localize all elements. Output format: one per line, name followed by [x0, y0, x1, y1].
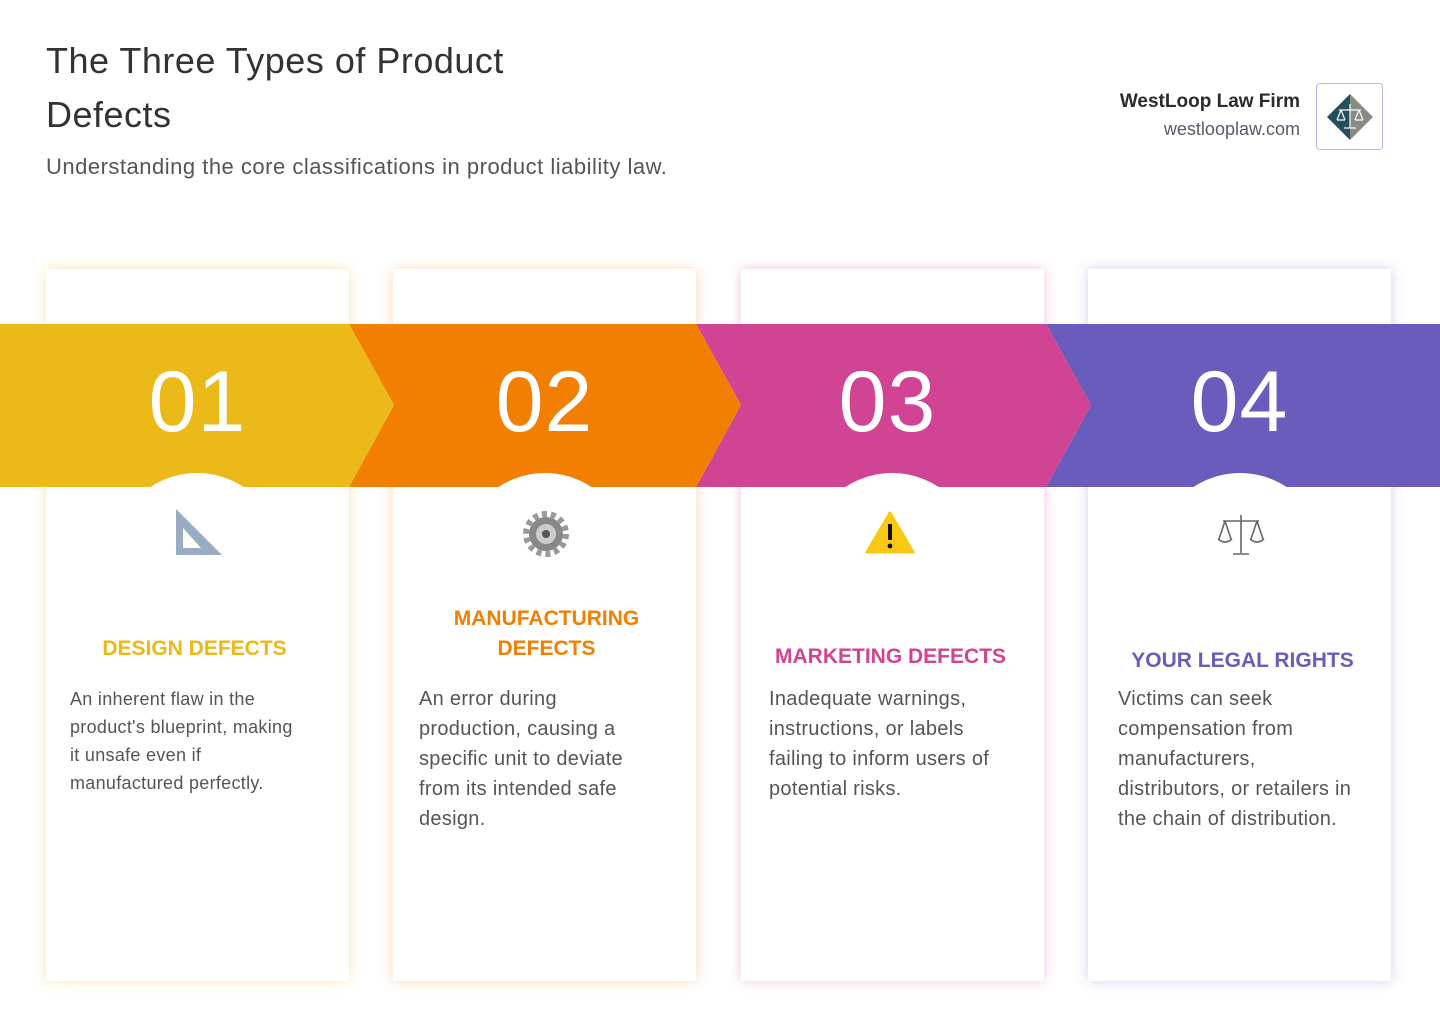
number 04: 04	[1191, 354, 1288, 450]
banner arrows	[0, 324, 1440, 487]
text: marketing: failing to inform users of	[769, 748, 989, 770]
text: marketing	[769, 688, 989, 800]
circle 2	[460, 473, 630, 643]
text: rights: distributors, or retailers in	[1118, 778, 1351, 800]
text: design	[70, 689, 293, 793]
card 3	[741, 269, 1044, 981]
text: manufacturing: specific unit to deviate	[419, 748, 623, 770]
text: manufacturing: production, causing a	[419, 718, 615, 740]
text: rights: compensation from	[1118, 718, 1293, 740]
text: rights	[1118, 688, 1351, 830]
text: marketing: instructions, or labels	[769, 718, 964, 740]
text: marketing: potential risks.	[769, 778, 902, 800]
text: manufacturing: An error during	[419, 688, 557, 710]
heading: manufacturing: MANUFACTURING	[454, 607, 639, 630]
text: manufacturing: from its intended safe	[419, 778, 617, 800]
circle 3	[807, 473, 977, 643]
number 02: 02	[496, 354, 593, 450]
card 2	[393, 269, 696, 981]
text: design: An inherent flaw in the	[70, 689, 255, 709]
circle 1	[112, 473, 282, 643]
text: rights: manufacturers,	[1118, 748, 1256, 770]
text: design: manufactured perfectly.	[70, 773, 264, 793]
subtitle: Understanding the core classifications in product liability law.	[46, 154, 667, 179]
text: design: product's blueprint, making	[70, 717, 293, 737]
brand url: westlooplaw.com	[1164, 119, 1300, 139]
brand name: WestLoop Law Firm	[1120, 91, 1300, 112]
circle 4	[1155, 473, 1325, 643]
heading: rights: YOUR LEGAL RIGHTS	[1131, 649, 1354, 672]
text: rights: the chain of distribution.	[1118, 808, 1337, 830]
number 01: 01	[149, 354, 246, 450]
icon: gear	[523, 511, 569, 557]
text: design: it unsafe even if	[70, 745, 201, 765]
card 1	[46, 269, 349, 981]
heading: manufacturing: DEFECTS	[497, 637, 596, 660]
title: The Three Types of Product Defects	[46, 40, 504, 135]
text: marketing: Inadequate warnings,	[769, 688, 966, 710]
heading: marketing: MARKETING DEFECTS	[775, 645, 1006, 668]
heading: design defects: DESIGN DEFECTS	[102, 637, 287, 660]
icon: scales	[1218, 515, 1264, 555]
text: rights: Victims can seek	[1118, 688, 1272, 710]
text: manufacturing	[419, 688, 623, 830]
heading: manufacturing	[454, 607, 639, 660]
text: manufacturing: design.	[419, 808, 486, 830]
icon: warning	[866, 511, 915, 554]
logo	[1316, 83, 1383, 150]
icon: set square	[176, 509, 222, 555]
card 4	[1088, 269, 1391, 981]
number 03: 03	[839, 354, 936, 450]
brand block	[1120, 83, 1383, 150]
